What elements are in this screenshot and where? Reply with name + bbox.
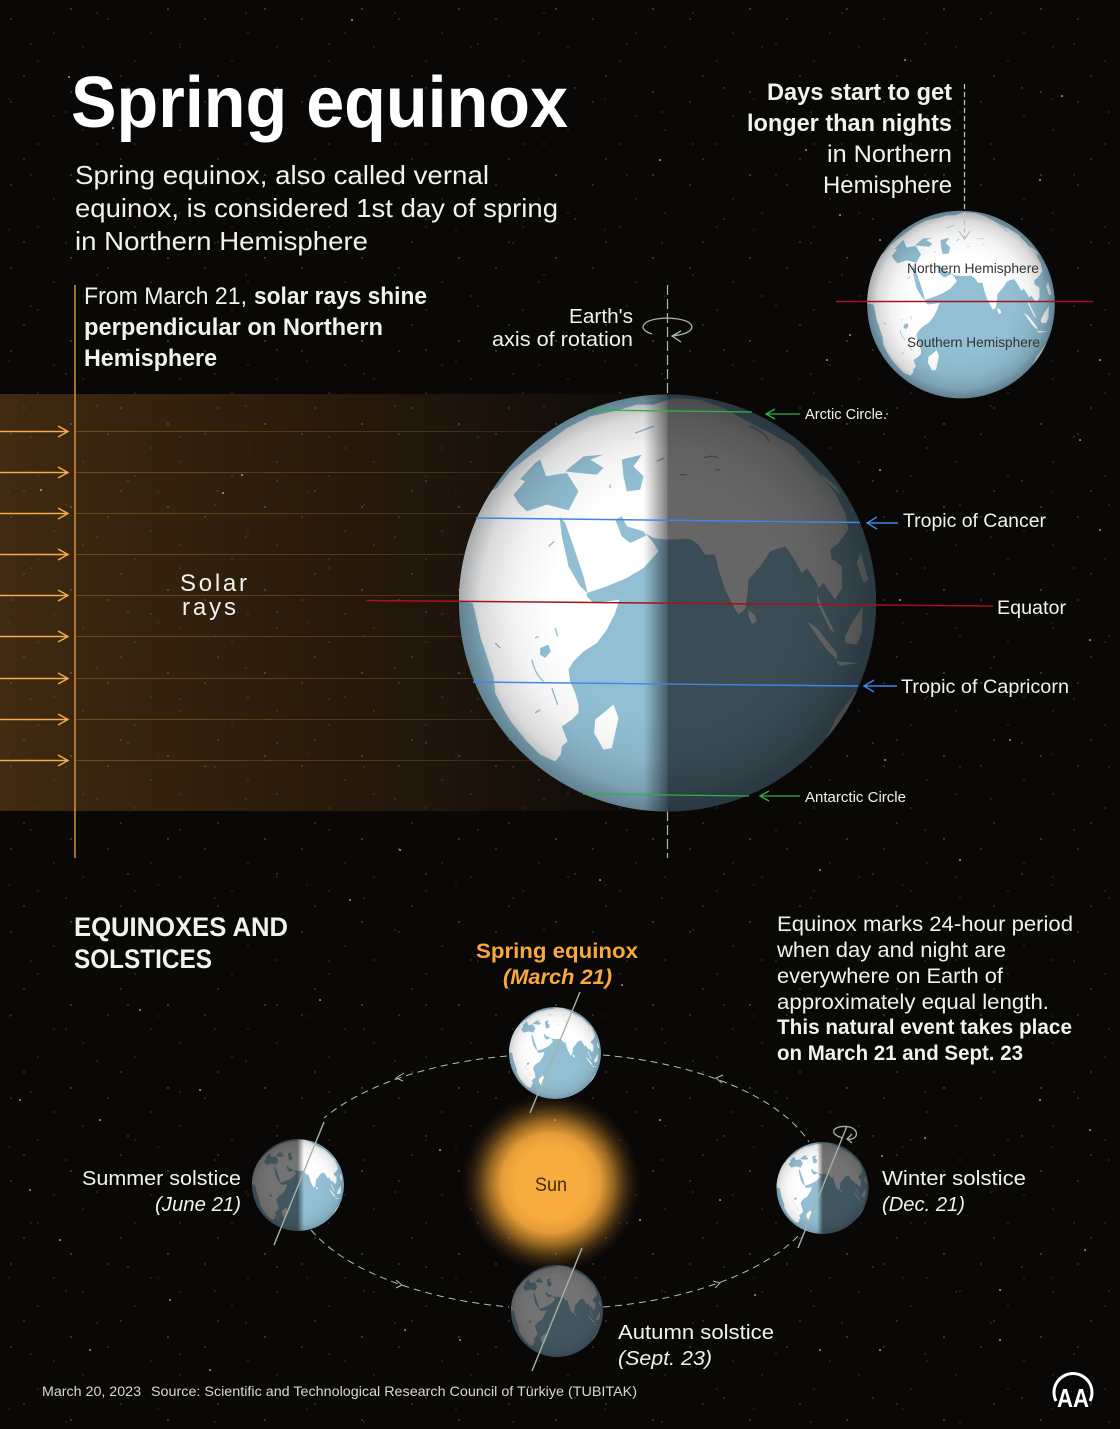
label: tropic of capricorn: Tropic of Capricorn [901,677,1069,698]
tropic of capricorn line [473,682,858,686]
icon: AA logo: AA [1057,1383,1089,1413]
text: equinox explanation: on March 21 and Sept. 23 [777,1042,1023,1065]
small globe: hemispheres: Northern Hemisphere [907,260,1039,276]
label: autumn solstice [618,1322,774,1370]
heading: equinoxes and solstices: SOLSTICES [74,944,212,974]
small globe: hemispheres: Southern Hemisphere [907,334,1040,350]
label: arctic circle [766,406,887,423]
text: equinox explanation: approximately equal length. [777,991,1049,1014]
text: equinox explanation: everywhere on Earth of [777,965,1003,988]
text: equinox explanation: when day and night are [776,939,1006,962]
intro text: solar rays: perpendicular on Northern [84,314,383,341]
globe: spring equinox [508,992,601,1113]
label: spring equinox: Spring equinox [476,940,638,963]
small globe: hemispheres [836,211,1093,398]
axis label: Earth's [569,306,633,328]
label: tropic of cancer: Tropic of Cancer [903,511,1047,532]
subtitle: in Northern Hemisphere [75,226,368,256]
label: antarctic circle [760,789,906,806]
arctic circle line [588,410,752,412]
solar ray band [0,394,660,811]
axis of rotation dashed line [643,285,692,858]
callout: days longer: Days start to get [767,79,952,106]
globe: winter solstice [775,1126,874,1248]
intro text: solar rays: From March 21, [84,283,247,310]
vertical solar line [74,285,76,858]
sun: Sun [535,1175,567,1196]
callout: days longer: in Northern [827,141,952,168]
antarctic circle line [583,794,749,796]
footer source: March 20, 2023 [42,1383,141,1399]
label: summer solstice: Summer solstice [82,1168,241,1190]
callout: days longer [747,79,952,199]
subtitle [75,160,558,256]
label: antarctic circle: Antarctic Circle [805,789,906,806]
orbit [311,1055,809,1307]
text: equinox explanation [776,913,1073,1065]
intro text: solar rays: Hemisphere [84,345,217,372]
label: solar rays [180,570,247,621]
label: spring equinox: (March 21) [503,966,612,989]
label: summer solstice: (June 21) [155,1194,241,1216]
label: solar rays: Solar [180,570,247,597]
label: summer solstice [82,1168,241,1216]
label: autumn solstice: (Sept. 23) [618,1348,712,1370]
subtitle: Spring equinox, also called vernal [75,160,489,190]
solar ray arrows [0,426,600,766]
text: equinox explanation: This natural event takes place [777,1016,1072,1039]
axis label [492,306,633,351]
globe: summer solstice [248,1122,344,1245]
label: autumn solstice: Autumn solstice [618,1322,774,1344]
text: equinox explanation: Equinox marks 24-hour period [777,913,1073,936]
equator line: hemispheres [836,300,1093,302]
globe: autumn [507,1248,610,1371]
arrow: to northern hemisphere [959,84,970,239]
icon: AA logo [1054,1374,1092,1413]
intro text: solar rays: solar rays shine [254,283,427,310]
label: winter solstice [882,1168,1026,1216]
footer source: Source: Scientific and Technological Research Council of Türkiye (TUBITAK) [151,1383,637,1399]
callout: days longer: longer than nights [747,110,952,137]
intro text: solar rays [84,283,427,372]
heading: equinoxes and solstices [74,912,288,974]
label: winter solstice: (Dec. 21) [882,1194,965,1216]
main globe [458,394,876,812]
label: spring equinox [476,940,638,989]
sun [461,1093,641,1273]
icon: rotation arrow [834,1126,856,1143]
label: winter solstice: Winter solstice [882,1168,1026,1190]
subtitle: equinox, is considered 1st day of spring [75,193,558,223]
heading: equinoxes and solstices: EQUINOXES AND [74,912,288,942]
callout: days longer: Hemisphere [823,172,952,199]
label: solar rays: rays [182,594,236,621]
equator line [366,600,993,606]
label: equator: Equator [997,598,1067,619]
label: arctic circle: Arctic Circle. [805,406,887,423]
axis label: axis of rotation [492,329,633,351]
title: Spring equinox [71,63,568,143]
tropic of cancer line [476,518,860,522]
